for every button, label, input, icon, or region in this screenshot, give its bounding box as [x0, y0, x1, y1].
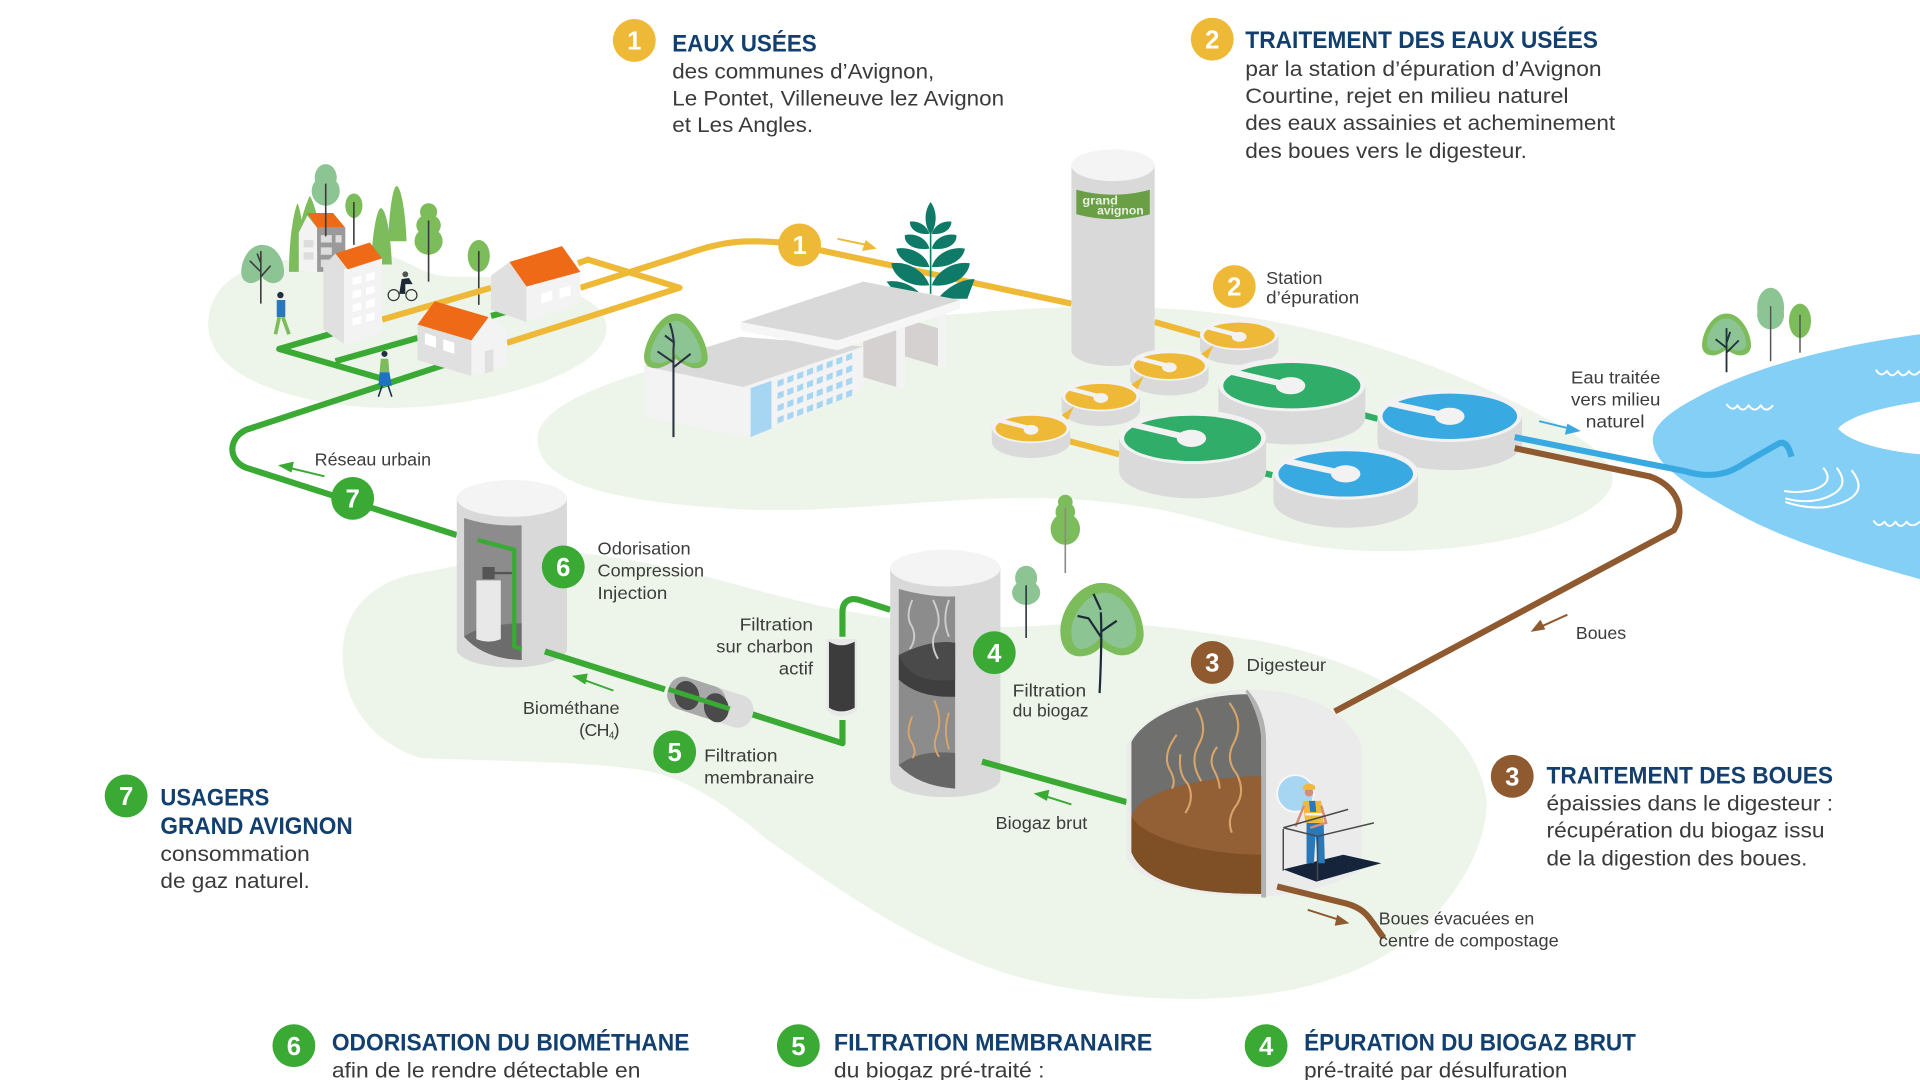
block 1: eaux usées: [613, 19, 1004, 137]
digester: [1127, 689, 1362, 896]
background area: biogas process: [343, 552, 1487, 999]
city trees: [241, 164, 490, 283]
icon: fern: [887, 202, 975, 299]
tree by building: [644, 313, 708, 437]
block 5: filtration membranaire: FILTRATION MEMBRANAIRE: [834, 1030, 1152, 1057]
trees by the river: [1702, 288, 1811, 372]
block 1: eaux usées: 1: [627, 28, 641, 56]
diagram labels: (CH: [579, 720, 609, 740]
block 4: épuration du biogaz brut: 4: [1259, 1033, 1274, 1061]
block 3: traitement des boues: 3: [1505, 764, 1519, 792]
diagram labels: centre de compostage: [1379, 931, 1559, 951]
block 5: filtration membranaire: [777, 1024, 1152, 1080]
tower with Grand Avignon logo: avignon: [1097, 203, 1144, 217]
diagram badges: 6: [556, 554, 570, 582]
small yellow links between basins: [1062, 345, 1213, 420]
diagram labels: Filtration: [1013, 681, 1086, 701]
membrane filter: [663, 673, 757, 732]
diagram labels: membranaire: [704, 768, 814, 788]
diagram labels: Boues évacuées en: [1379, 908, 1534, 928]
block 7: usagers: GRAND AVIGNON: [160, 813, 353, 840]
block 2: traitement des eaux usées: TRAITEMENT DES EAUX USÉES: [1245, 26, 1598, 54]
block 4: épuration du biogaz brut: ÉPURATION DU BIOGAZ BRUT: [1304, 1029, 1636, 1057]
tower with Grand Avignon logo: grand: [1082, 193, 1118, 207]
diagram badges: [331, 223, 1256, 773]
diagram badges: 1: [792, 232, 807, 260]
worker on platform: [1277, 775, 1381, 882]
biogas pipe: [982, 762, 1127, 802]
connectors between basins: [1068, 414, 1378, 475]
diagram labels: sur charbon: [716, 637, 813, 657]
block 3: traitement des boues: épaissies dans le digesteur :: [1547, 793, 1833, 816]
block 1: eaux usées: et Les Angles.: [672, 114, 813, 137]
building: [644, 282, 960, 438]
person walking woman: [378, 351, 392, 397]
block 7: usagers: consommation: [160, 843, 310, 866]
diagram labels: Filtration: [704, 746, 778, 766]
green pipes in the city: [232, 311, 509, 535]
block 2: traitement des eaux usées: par la station d’épuration d’Avignon: [1245, 58, 1602, 81]
flow arrows: [278, 239, 1581, 926]
block 3: traitement des boues: de la digestion des boues.: [1547, 848, 1807, 871]
green basin 2: [1119, 410, 1266, 498]
block 2: traitement des eaux usées: des eaux assainies et acheminement: [1245, 112, 1615, 135]
city house front: [418, 301, 507, 376]
diagram badges: 4: [987, 640, 1002, 668]
block 2: traitement des eaux usées: [1191, 18, 1615, 163]
diagram labels: Biométhane: [523, 698, 620, 718]
sludge pipe: [1335, 448, 1679, 711]
river: [1653, 334, 1920, 579]
diagram labels: Réseau urbain: [315, 449, 431, 469]
diagram labels: Boues: [1576, 623, 1626, 643]
block 3: traitement des boues: [1491, 755, 1833, 871]
block 7: usagers: 7: [119, 783, 133, 811]
block 2: traitement des eaux usées: 2: [1205, 26, 1219, 54]
diagram labels: Injection: [598, 583, 667, 603]
charcoal filter: [827, 599, 890, 716]
diagram labels: Eau traitée: [1571, 367, 1661, 387]
diagram labels: vers milieu: [1571, 389, 1660, 409]
cylinder 6: odorisation: [457, 480, 567, 667]
city house right: [491, 246, 580, 322]
block 6: odorisation du biométhane: [272, 1024, 689, 1080]
diagram labels: Digesteur: [1247, 655, 1326, 675]
diagram badges: 3: [1205, 650, 1219, 678]
diagram badges: 5: [668, 739, 682, 767]
yellow basin 3: [1062, 380, 1140, 426]
yellow basin 4: [992, 411, 1070, 458]
block 2: traitement des eaux usées: des boues vers le digesteur.: [1245, 140, 1527, 163]
block 4: épuration du biogaz brut: [1245, 1024, 1636, 1080]
diagram badges: 7: [346, 486, 360, 514]
city apartment tower: [323, 242, 382, 347]
cyclist: [388, 271, 417, 301]
block 1: eaux usées: Le Pontet, Villeneuve lez Avignon: [672, 87, 1004, 110]
diagram badges: 2: [1227, 274, 1241, 302]
diagram labels: d’épuration: [1266, 288, 1359, 308]
diagram labels: Filtration: [740, 615, 813, 635]
diagram labels: [315, 268, 1661, 951]
diagram labels: Odorisation: [598, 539, 691, 559]
treated water pipe: [1515, 437, 1791, 475]
block 6: odorisation du biométhane: ODORISATION DU BIOMÉTHANE: [332, 1029, 689, 1057]
diagram labels: naturel: [1586, 411, 1644, 431]
biomethane pipe: [545, 651, 842, 743]
tower with Grand Avignon logo: [1071, 149, 1155, 366]
block 7: usagers: [105, 774, 353, 893]
block 1: eaux usées: EAUX USÉES: [672, 29, 817, 57]
block 3: traitement des boues: TRAITEMENT DES BOUES: [1547, 763, 1833, 790]
block 1: eaux usées: des communes d’Avignon,: [672, 60, 934, 83]
cylinder 4: biogas purification: [890, 550, 1000, 797]
diagram labels: actif: [779, 659, 813, 679]
blue basin 1: [1378, 388, 1522, 470]
sludge evacuation pipe: [1277, 887, 1384, 938]
yellow wastewater pipes: [382, 241, 1206, 343]
diagram labels: Station: [1266, 268, 1322, 288]
background area: treatment plant: [537, 307, 1613, 551]
city back building: [299, 213, 345, 272]
green basin 1: [1218, 358, 1365, 444]
diagram labels: ): [614, 720, 620, 740]
diagram labels: du biogaz: [1013, 700, 1089, 720]
diagram labels: Biogaz brut: [996, 813, 1087, 833]
city tree trunks: [250, 184, 479, 305]
block 2: traitement des eaux usées: Courtine, rejet en milieu naturel: [1245, 85, 1569, 108]
diagram labels: 4: [609, 730, 615, 741]
yellow basin 1: [1200, 318, 1278, 365]
yellow basin 2: [1130, 349, 1209, 396]
blue basin 2: [1273, 446, 1418, 528]
block 5: filtration membranaire: 5: [791, 1033, 806, 1061]
block 7: usagers: de gaz naturel.: [160, 870, 310, 893]
block 7: usagers: USAGERS: [160, 785, 269, 812]
block 6: odorisation du biométhane: 6: [287, 1033, 301, 1061]
person walking left: [276, 292, 289, 334]
diagram labels: Compression: [598, 561, 704, 581]
trees in plant zone: [1012, 495, 1144, 693]
block 3: traitement des boues: récupération du biogaz issu: [1547, 820, 1824, 843]
background area: city: [208, 253, 606, 408]
